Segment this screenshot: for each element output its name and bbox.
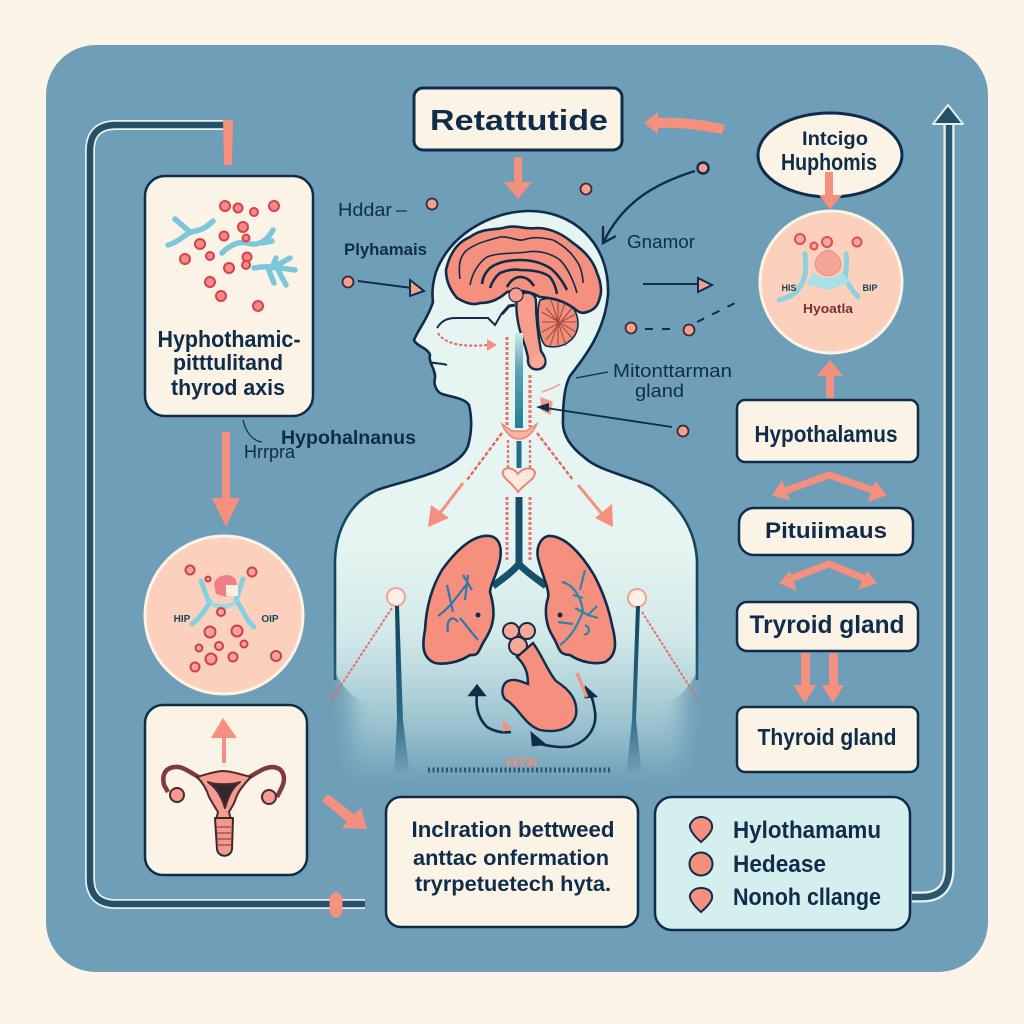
circle: gland detail top right: HIS	[781, 283, 797, 293]
circle: cells detail left	[145, 536, 303, 694]
label: Mitonttarman gland: gland	[635, 381, 684, 401]
arrow: dot to throat	[536, 403, 688, 436]
card: reproductive organ icon	[145, 705, 307, 875]
legend marker 1	[690, 817, 712, 842]
right pulse marker	[626, 589, 698, 778]
box: legend	[655, 797, 910, 930]
small gland near throat	[541, 384, 560, 414]
arrows: double down	[793, 653, 844, 703]
body outline	[335, 211, 697, 680]
curved arrows around stomach	[470, 673, 595, 747]
arrow: hypothalamus box to circle	[817, 360, 843, 398]
legend marker 2	[690, 852, 712, 876]
box: thyroid gland	[737, 707, 918, 772]
arrow: right of head	[643, 278, 712, 292]
oval label: Huphomis	[781, 149, 877, 175]
card: hypothalamic-pituitary-thyroid axis	[145, 176, 313, 416]
circle: gland detail top right	[760, 211, 902, 353]
stomach	[502, 623, 576, 731]
arrow: into title	[644, 112, 725, 134]
card: hypothalamic-pituitary-thyroid axis: thyrod axis	[171, 375, 285, 400]
oval label: Intcigo	[802, 129, 868, 150]
box: pituitary	[739, 508, 913, 555]
bottom scale label: HTA	[506, 754, 538, 770]
arrow: red out to left body	[428, 433, 502, 527]
box: hypothalamus	[737, 400, 918, 462]
box: information: Inclration bettweed	[412, 817, 614, 842]
arrow: red out to right body	[537, 433, 613, 527]
label: Plyhamais: Plyhamais	[344, 240, 427, 259]
dashed arrow: nose	[438, 333, 497, 351]
box: legend: Nonoh cllange	[733, 884, 881, 911]
box: tryroid gland	[737, 602, 918, 651]
arrow: to info box	[322, 794, 367, 829]
circle: cells detail left: OIP	[261, 614, 279, 625]
brainstem	[516, 293, 545, 369]
box: legend: Hedease	[733, 851, 826, 878]
oval label	[758, 113, 902, 197]
box: information: anttac onfermation	[413, 847, 609, 870]
dot	[580, 184, 592, 194]
card text: Hyphothamic-	[158, 326, 300, 352]
arrow: title to head	[504, 157, 532, 199]
leader and labels under card: Hypohalnanus	[281, 428, 416, 449]
trachea branches	[493, 497, 546, 586]
thyroid small organ	[503, 468, 535, 492]
label: Mitonttarman gland: Mitonttarman	[613, 361, 732, 381]
box: thyroid gland: Thyroid gland	[758, 724, 896, 750]
label: Gnamor: Gnamor	[627, 232, 695, 252]
arrows: hypothalamus to pituitary	[772, 475, 887, 502]
label: Mitonttarman gland	[576, 361, 732, 401]
left lung	[423, 536, 501, 664]
arrow: card to circle	[212, 432, 240, 527]
title box	[414, 88, 622, 150]
circle: gland detail top right: BIP	[862, 283, 878, 293]
molecule branches	[168, 219, 295, 285]
box: pituitary: Pituiimaus	[765, 518, 887, 543]
brain	[446, 227, 601, 369]
leader and labels under card: Hrrpra	[244, 442, 296, 462]
box: legend: Hylothamamu	[733, 817, 881, 844]
arrow: oval to circle	[819, 172, 842, 209]
label: Hddar: Hddar	[338, 200, 392, 220]
body silhouette	[335, 211, 697, 772]
cerebellum	[538, 298, 578, 347]
left pulse marker	[330, 588, 410, 778]
arrows: pituitary to thyroid	[779, 564, 877, 591]
circle: cells detail left: HIP	[174, 614, 191, 625]
title box: Retattutide	[430, 105, 608, 137]
box: information	[386, 797, 638, 927]
molecule dots	[180, 201, 279, 311]
leader and labels under card	[243, 420, 416, 462]
right feedback loop arrow	[912, 105, 963, 897]
dot	[426, 198, 438, 210]
left feedback loop line	[90, 120, 365, 911]
arrow up	[211, 718, 237, 763]
right lung	[537, 536, 615, 663]
curved arrow: dot to head top	[603, 162, 708, 243]
dashed line with dots	[626, 303, 735, 336]
box: information: tryrpetuetech hyta.	[415, 873, 611, 896]
circle: gland detail top right: Hyoatla	[803, 301, 854, 316]
legend marker 3	[690, 888, 712, 912]
spinal column and trachea	[502, 333, 537, 468]
box: tryroid gland: Tryroid gland	[750, 611, 904, 639]
uterus	[163, 767, 284, 856]
box: hypothalamus: Hypothalamus	[754, 421, 898, 447]
card: hypothalamic-pituitary-thyroid axis: pitttulitand	[173, 350, 283, 375]
arrow: from left dot to head	[342, 276, 424, 296]
